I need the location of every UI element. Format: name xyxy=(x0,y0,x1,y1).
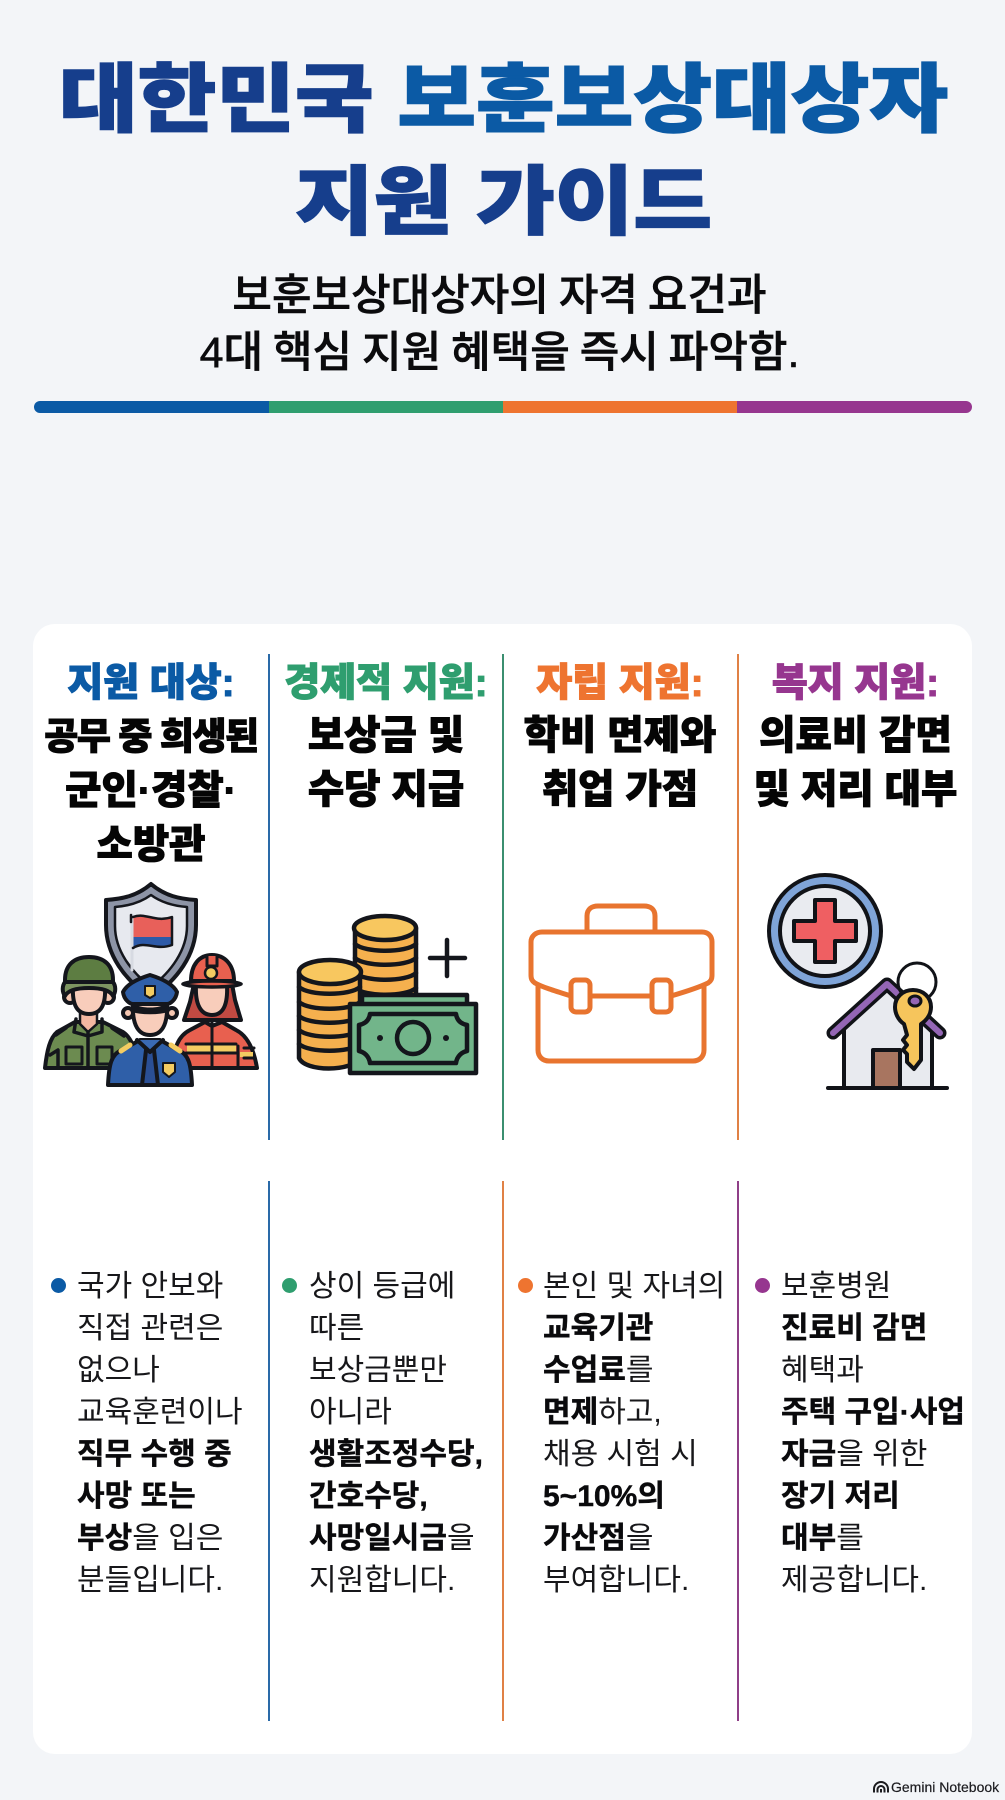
text: column 4: 제공합니다. xyxy=(781,1564,927,1597)
text: column 2: 아니라 xyxy=(309,1396,392,1429)
text: column 4: 진료비 감면 xyxy=(781,1312,927,1345)
text: column 3: 수업료를 xyxy=(543,1354,653,1387)
text: column 1: 사망 또는 xyxy=(77,1480,196,1513)
title: 대한민국 보훈보상대상자 xyxy=(59,59,948,142)
heading: column 3: 학비 면제와 xyxy=(524,714,716,758)
bullet: column 3 xyxy=(518,1278,533,1293)
icon: coins and banknotes xyxy=(296,914,478,1076)
text: column 3: 부여합니다. xyxy=(543,1564,689,1597)
text: column 3: 5~10%의 xyxy=(543,1480,665,1513)
text: column 3: 면제하고, xyxy=(543,1396,662,1429)
text: column 1 xyxy=(77,1270,243,1597)
text: column 2: 상이 등급에 xyxy=(309,1270,455,1303)
text: column 3: 교육기관 xyxy=(543,1312,653,1345)
heading: column 2: 보상금 및 xyxy=(308,714,464,758)
text: column 1: 직무 수행 중 xyxy=(77,1438,232,1471)
text: column 4: 자금을 위한 xyxy=(781,1438,927,1471)
text: column 4: 주택 구입·사업 xyxy=(781,1396,965,1429)
heading: column 2 xyxy=(284,662,488,812)
subtitle xyxy=(200,272,799,377)
text: column 2: 생활조정수당, xyxy=(309,1438,483,1471)
text: column 2: 보상금뿐만 xyxy=(309,1354,447,1387)
heading: column 3 xyxy=(524,662,716,812)
text: column 4: 보훈병원 xyxy=(781,1270,891,1303)
panel: support card xyxy=(33,624,972,1754)
heading: column 1: 소방관 xyxy=(96,823,206,867)
heading: column 1: 군인·경찰· xyxy=(65,769,237,813)
text: column 2: 지원합니다. xyxy=(309,1564,455,1597)
icon: briefcase xyxy=(528,904,714,1064)
color bar xyxy=(34,401,972,413)
title xyxy=(59,59,948,244)
text: column 4: 혜택과 xyxy=(781,1354,864,1387)
heading: column 2: 경제적 지원: xyxy=(284,662,488,705)
text: column 1: 부상을 입은 xyxy=(77,1522,223,1555)
heading: column 4: 의료비 감면 xyxy=(759,714,952,758)
text: column 1: 직접 관련은 xyxy=(77,1312,223,1345)
icon: soldier police firefighter with shield xyxy=(43,882,259,1087)
bullet: column 4 xyxy=(755,1278,770,1293)
heading: column 1: 지원 대상: xyxy=(67,662,235,705)
title: 지원 가이드 xyxy=(295,161,712,244)
heading: column 4: 및 저리 대부 xyxy=(754,768,957,812)
heading: column 1: 공무 중 희생된 xyxy=(44,716,258,757)
text: column 4: 대부를 xyxy=(781,1522,864,1555)
text: column 2: 따른 xyxy=(309,1312,364,1345)
icon: medical cross and house with key xyxy=(767,873,949,1090)
text: column 1: 없으나 xyxy=(77,1354,160,1387)
text: column 3 xyxy=(543,1270,725,1597)
text: column 1: 교육훈련이나 xyxy=(77,1396,243,1429)
text: column 2: 간호수당, xyxy=(309,1480,428,1513)
text: column 1: 분들입니다. xyxy=(77,1564,223,1597)
heading: column 2: 수당 지급 xyxy=(308,768,464,812)
text: column 4 xyxy=(781,1270,965,1597)
text: column 3: 가산점을 xyxy=(543,1522,653,1555)
subtitle: 보훈보상대상자의 자격 요건과 xyxy=(232,272,767,320)
footer logo: Gemini Notebook xyxy=(891,1779,999,1795)
text: column 3: 본인 및 자녀의 xyxy=(543,1270,725,1303)
bullet: column 2 xyxy=(282,1278,297,1293)
text: column 2 xyxy=(309,1270,483,1597)
bullet: column 1 xyxy=(51,1278,66,1293)
heading: column 4 xyxy=(754,662,957,812)
heading: column 3: 취업 가점 xyxy=(542,768,698,812)
text: column 1: 국가 안보와 xyxy=(77,1270,223,1303)
heading: column 1 xyxy=(44,662,258,867)
text: column 3: 채용 시험 시 xyxy=(543,1438,698,1471)
heading: column 3: 자립 지원: xyxy=(536,662,704,705)
subtitle: 4대 핵심 지원 혜택을 즉시 파악함. xyxy=(200,329,799,377)
text: column 2: 사망일시금을 xyxy=(309,1522,475,1555)
text: column 4: 장기 저리 xyxy=(781,1480,900,1513)
heading: column 4: 복지 지원: xyxy=(772,662,939,705)
